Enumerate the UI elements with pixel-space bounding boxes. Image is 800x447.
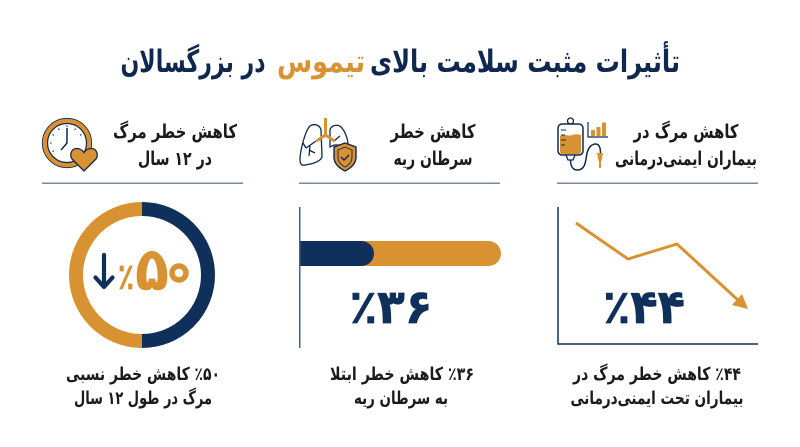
caption: immunotherapy mortality [570, 363, 744, 409]
heading: lung cancer risk [390, 121, 476, 170]
title: در بزرگسالان [120, 43, 266, 80]
chart: declining line [558, 207, 758, 344]
heading: immunotherapy mortality [615, 120, 757, 170]
title [120, 41, 680, 80]
title: تیموس [277, 44, 365, 80]
donut value: ۵ [135, 235, 169, 305]
donut value: ۰ [167, 246, 191, 292]
caption: lung cancer risk: به سرطان ریه [354, 388, 448, 409]
heading: 12-year mortality risk: کاهش خطر مرگ [113, 120, 238, 143]
panel: 12-year mortality risk [42, 118, 243, 409]
panel: immunotherapy mortality [557, 118, 758, 409]
caption: 12-year mortality risk: مرگ در طول ۱۲ سال [74, 387, 212, 409]
chart: 50 percent donut [76, 209, 208, 341]
heading: lung cancer risk: کاهش خطر [390, 121, 476, 143]
caption: lung cancer risk [330, 364, 474, 409]
heading: immunotherapy mortality: کاهش مرگ در [633, 120, 739, 143]
heading: 12-year mortality risk [113, 120, 238, 170]
heading: 12-year mortality risk: در ۱۲ سال [138, 148, 212, 170]
caption: lung cancer risk: ٪۳۶ کاهش خطر ابتلا [330, 364, 474, 385]
heading: lung cancer risk: سرطان ریه [394, 148, 472, 170]
caption: 12-year mortality risk: ٪۵۰ کاهش خطر نسبی [66, 364, 220, 385]
icon: infusion bag with bars [558, 118, 608, 170]
panel: lung cancer risk [299, 118, 501, 409]
chart: 36 percent progress bar [299, 207, 501, 348]
donut value: ٪ [118, 257, 134, 298]
bar value: ٪۳۶ [350, 280, 432, 335]
title: تأثیرات مثبت سلامت بالای [370, 41, 680, 80]
caption: immunotherapy mortality: ٪۴۴ کاهش خطر مرگ در [572, 363, 741, 385]
caption: immunotherapy mortality: بیماران تحت ایمنی‌درمانی [570, 388, 744, 409]
caption: 12-year mortality risk [66, 364, 220, 409]
line chart value: ٪۴۴ [603, 280, 685, 335]
icon: lungs with shield [300, 118, 356, 171]
icon: clock with heart [42, 118, 97, 171]
donut value [118, 235, 191, 305]
icon: down arrow [96, 255, 112, 287]
